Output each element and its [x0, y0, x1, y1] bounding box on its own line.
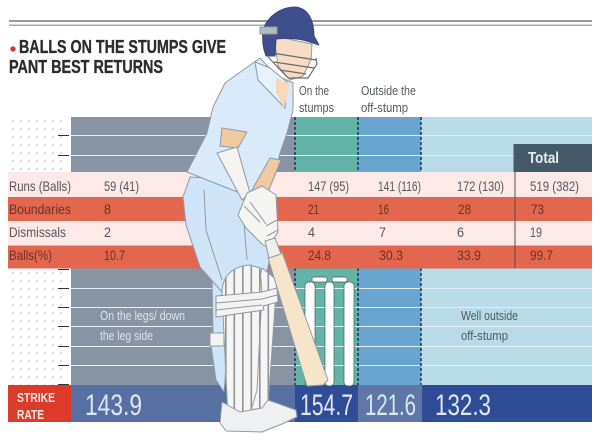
double rule: [9, 20, 592, 26]
strike rate values: 132.3: [435, 389, 491, 422]
row: dismissals: Dismissals: [9, 224, 66, 240]
row: dismissals: 6: [457, 224, 464, 240]
strike rate label: RATE: [17, 407, 44, 422]
row: balls percent: 30.3: [379, 247, 403, 263]
row: balls percent: [9, 247, 553, 263]
helmet grille: [268, 53, 317, 78]
row: boundaries: 28: [458, 201, 471, 217]
title: BALLS ON THE STUMPS GIVE: [19, 36, 226, 57]
row: balls percent: 24.8: [308, 247, 331, 263]
front pad: [222, 265, 262, 418]
row: balls percent: 10.7: [104, 247, 125, 263]
player illustration: [183, 7, 328, 432]
zone label: on the legs: On the legs/ down: [100, 308, 185, 323]
bat handle: [265, 238, 281, 258]
zone dashed dividers: [295, 117, 421, 385]
tick marks: [58, 136, 69, 384]
strike rate values: 121.6: [365, 389, 416, 422]
back leg: [211, 275, 232, 392]
second pad: [250, 268, 277, 410]
title: PANT BEST RETURNS: [9, 56, 163, 77]
column heading: on the stumps: On the: [299, 83, 329, 98]
column heading: outside the off-stump: Outside the: [361, 83, 416, 98]
upper zone bands: [71, 117, 592, 172]
trousers: [183, 177, 276, 292]
strike rate label: [17, 390, 55, 422]
row: boundaries: 21: [308, 201, 319, 217]
column heading: outside the off-stump: [361, 83, 416, 115]
zone label: on the legs: the leg side: [100, 328, 153, 343]
row: dismissals: 2: [104, 224, 111, 240]
row: boundaries: 8: [104, 201, 111, 217]
row: runs (balls): 519 (382): [530, 178, 579, 194]
row: boundaries: 73: [531, 201, 544, 217]
row: runs (balls): 147 (95): [308, 178, 349, 194]
icon: stumps: [305, 277, 354, 386]
row: balls percent: 99.7: [530, 247, 553, 263]
gloves: [238, 186, 278, 248]
row: runs (balls): 59 (41): [104, 178, 139, 194]
zone label: on the legs: [100, 308, 185, 343]
row: balls percent: Balls(%): [9, 247, 52, 263]
bat: [268, 252, 328, 386]
face: [274, 36, 312, 80]
row: boundaries: Boundaries: [9, 201, 71, 217]
row: dismissals: 7: [379, 224, 386, 240]
lower zone bands: [71, 268, 592, 385]
helmet: [263, 7, 319, 56]
stats table backgrounds: [8, 172, 592, 268]
forearm skin: [252, 158, 281, 192]
strike rate values: [85, 389, 491, 422]
shoes: [220, 400, 297, 432]
total header: [514, 144, 592, 172]
strike rate band: [8, 385, 592, 422]
arm guard: [217, 147, 250, 200]
row: runs (balls): [9, 178, 579, 194]
zone label: well outside off-stump: Well outside: [461, 308, 518, 323]
dotted side pattern: [9, 117, 63, 385]
helmet badge: [260, 27, 277, 34]
total header: Total: [528, 150, 559, 167]
strike rate values: 143.9: [85, 389, 142, 422]
row: boundaries: [9, 201, 544, 217]
row: runs (balls): Runs (Balls): [9, 178, 71, 194]
row: dismissals: [9, 224, 542, 240]
row: runs (balls): 172 (130): [457, 178, 504, 194]
shirt: [187, 58, 293, 197]
row: balls percent: 33.9: [457, 247, 481, 263]
row: dismissals: 4: [308, 224, 315, 240]
column heading: on the stumps: stumps: [299, 100, 334, 115]
row: runs (balls): 141 (116): [378, 178, 421, 194]
neck skin: [276, 78, 290, 108]
knee rolls: [216, 288, 278, 317]
row: boundaries: 16: [378, 201, 389, 217]
upper arm skin: [220, 128, 247, 148]
column heading: on the stumps: [299, 83, 334, 115]
zone label: well outside off-stump: off-stump: [461, 328, 508, 343]
back leg knee pad: [210, 333, 224, 346]
column heading: outside the off-stump: off-stump: [361, 100, 408, 115]
strike rate label: STRIKE: [17, 390, 55, 405]
title: [9, 36, 226, 77]
row: dismissals: 19: [530, 224, 542, 240]
zone label: well outside off-stump: [461, 308, 518, 343]
strike rate values: 154.7: [300, 389, 353, 422]
